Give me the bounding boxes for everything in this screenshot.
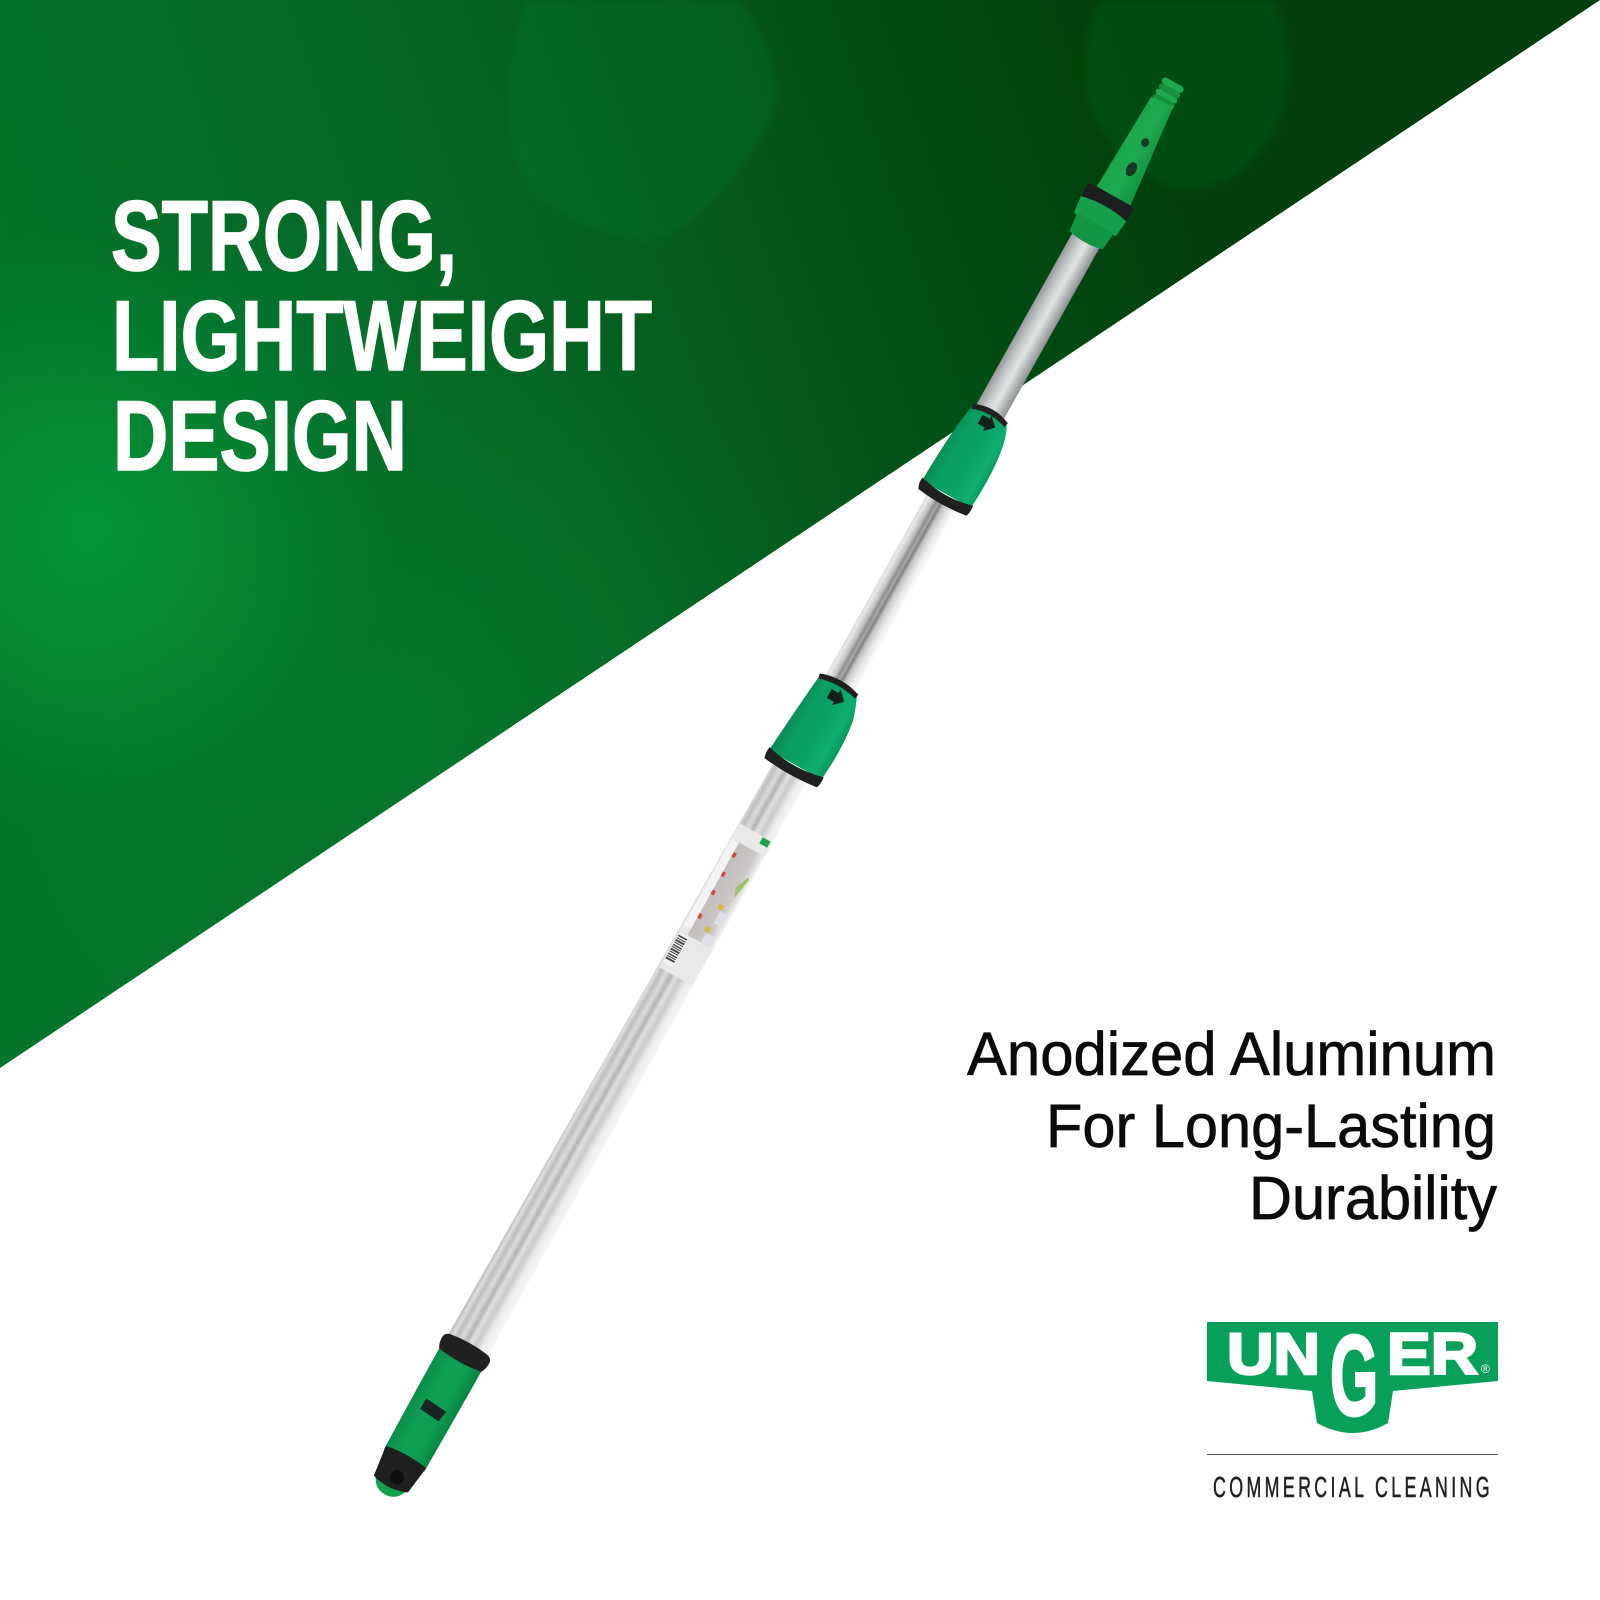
logo: Unger commercial cleaning (1207, 1313, 1498, 1504)
divider (1207, 1454, 1498, 1455)
upper locking collar (915, 396, 1019, 518)
middle ribbed tube (823, 489, 959, 697)
wordmark: UN (1227, 1322, 1320, 1387)
bottom grip (361, 1330, 493, 1508)
product: telescopic pole (359, 68, 1204, 1511)
lower locking collar (762, 666, 870, 790)
wordmark: ER (1387, 1322, 1478, 1387)
logo banner (1207, 1322, 1498, 1433)
body text: anodized aluminum: Durability (1249, 1164, 1497, 1232)
nozzle tip (1062, 69, 1197, 255)
upper smooth tube (974, 231, 1101, 425)
title: LIGHTWEIGHT (112, 280, 652, 391)
lower ribbed tube (443, 755, 811, 1366)
body text: anodized aluminum (967, 1020, 1497, 1232)
product label wrap (659, 823, 773, 986)
wordmark (1227, 1313, 1478, 1440)
body text: anodized aluminum: For Long-Lasting (1046, 1092, 1496, 1160)
title: STRONG, (111, 180, 457, 291)
wordmark: G (1330, 1313, 1378, 1440)
panel: green diagonal background (0, 0, 1600, 1100)
title: DESIGN (113, 380, 407, 491)
registered mark: ® (1481, 1362, 1490, 1376)
body text: anodized aluminum: Anodized Aluminum (967, 1020, 1496, 1088)
title (111, 180, 652, 491)
